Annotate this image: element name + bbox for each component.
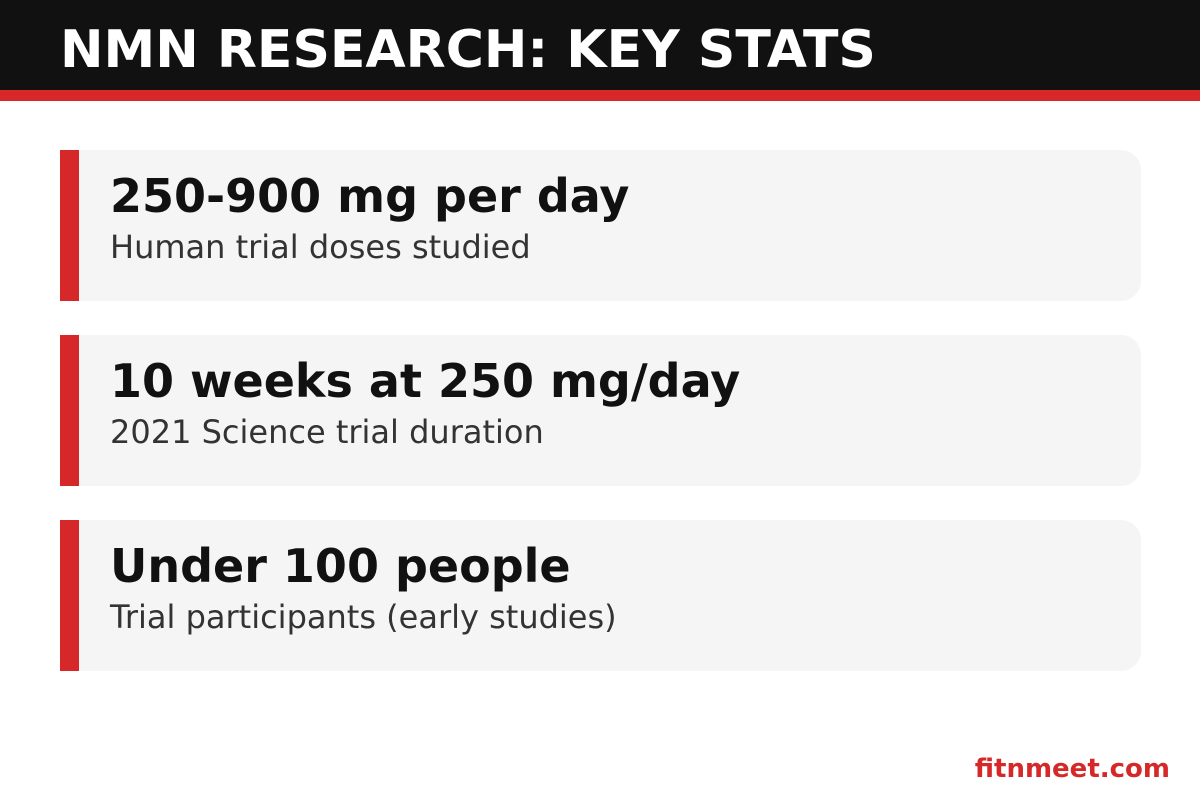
stat heading: Under 100 people (110, 539, 571, 593)
header red rule (0, 90, 1200, 101)
title: NMN RESEARCH: KEY STATS (60, 20, 876, 80)
panel: participants stat (60, 520, 1141, 671)
stat description: Human trial doses studied (110, 228, 531, 266)
stat description: Trial participants (early studies) (110, 598, 617, 636)
red accent bar (60, 520, 79, 671)
header band (0, 0, 1200, 90)
stat heading: 250-900 mg per day (110, 169, 629, 223)
panel: duration stat (60, 335, 1141, 486)
stat description: 2021 Science trial duration (110, 413, 544, 451)
footer source: fitnmeet.com (975, 754, 1170, 784)
card background (60, 335, 1141, 486)
stat heading: 10 weeks at 250 mg/day (110, 354, 740, 408)
card background (60, 520, 1141, 671)
card background (60, 150, 1141, 301)
panel: dose stat (60, 150, 1141, 301)
red accent bar (60, 335, 79, 486)
red accent bar (60, 150, 79, 301)
